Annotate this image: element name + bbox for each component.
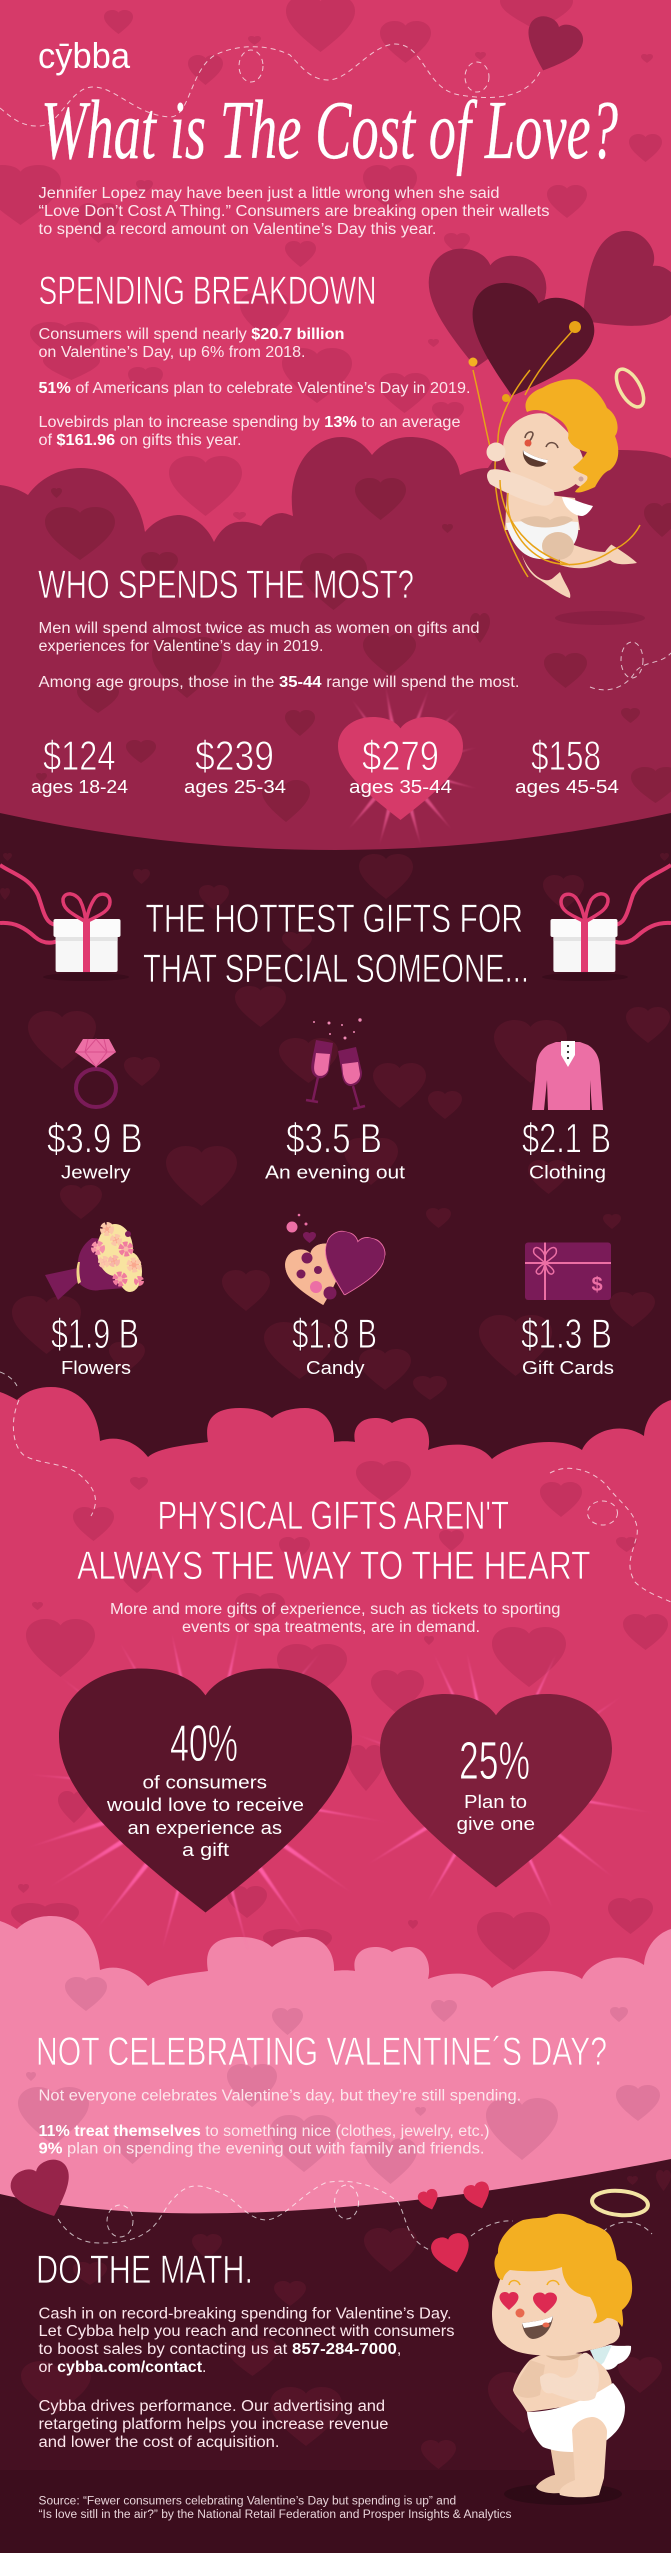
age 35-44: ages 35-44: [349, 777, 452, 797]
item: jewelry: Jewelry: [61, 1163, 130, 1183]
heading: do the math: DO THE MATH.: [36, 2248, 253, 2292]
cupid nose: [524, 440, 532, 446]
spending stats text: 51% of Americans plan to celebrate Valentine’s Day in 2019.: [38, 380, 470, 397]
cupid eyes: [525, 432, 558, 448]
experiences text: events or spa treatments, are in demand.: [182, 1619, 480, 1636]
spending stats text: [38, 326, 470, 449]
icon: heart balloons: [418, 220, 671, 577]
age 18-24: ages 18-24: [31, 777, 128, 797]
item: flowers: Flowers: [61, 1358, 131, 1378]
who spends text: experiences for Valentine’s day in 2019.: [38, 638, 324, 655]
intro text: Jennifer Lopez may have been just a little wrong when she said: [38, 185, 500, 202]
not celebrating text: 9% plan on spending the evening out with family and friends.: [38, 2141, 484, 2158]
age 45-54: ages 45-54: [515, 777, 619, 797]
item: candy: Candy: [306, 1358, 364, 1378]
do the math text: or cybba.com/contact .: [38, 2359, 206, 2376]
intro text: to spend a record amount on Valentine’s Day this year.: [38, 221, 436, 238]
callout: 40 percent heart: [23, 1628, 393, 1950]
icon: bouquet: [45, 1224, 142, 1300]
item: candy: [282, 1214, 389, 1378]
cupid far leg: [522, 555, 570, 598]
item: evening out: An evening out: [265, 1163, 405, 1183]
cupid wing: [562, 497, 593, 516]
item: jewelry: [47, 1039, 142, 1183]
age 25-34: $239: [195, 732, 274, 779]
item: jewelry: $3.9 B: [47, 1114, 142, 1162]
cupid diaper: [506, 521, 578, 559]
age 35-44: $279: [362, 732, 439, 779]
callout: 40 percent heart: 40%: [170, 1715, 238, 1773]
left arm: [514, 2360, 545, 2398]
age 18-24: $124: [43, 732, 116, 779]
shadow: [504, 2483, 622, 2505]
halo: [591, 2189, 649, 2217]
cupid hair: [525, 379, 618, 493]
item: clothing: $2.1 B: [522, 1114, 611, 1162]
callout: 25 percent heart: give one: [456, 1814, 535, 1834]
heart: [380, 1694, 612, 1888]
callout: 25 percent heart: [353, 1652, 658, 1909]
callout: 25 percent heart: 25%: [459, 1731, 530, 1791]
back leg: [536, 2445, 578, 2493]
heart: [59, 1668, 352, 1912]
logo: cȳbba: [38, 35, 131, 76]
icon: right gift box: [542, 865, 671, 981]
item: candy: $1.8 B: [292, 1310, 377, 1357]
highlight heart: [338, 717, 463, 820]
section background: light pink not celebrating: [0, 1916, 671, 2519]
face: [492, 2260, 620, 2355]
item: flowers: $1.9 B: [51, 1310, 139, 1357]
section background: pink experiences: [0, 1387, 671, 1990]
callout: 40 percent heart: a gift: [182, 1840, 229, 1860]
item: evening out: $3.5 B: [286, 1114, 382, 1162]
torso: [513, 2352, 613, 2412]
do the math text: Let Cybba help you reach and reconnect with consumers: [38, 2323, 455, 2340]
source note: [38, 2496, 512, 2521]
section background: deep maroon gifts: [0, 813, 671, 1500]
spending stats text: Consumers will spend nearly $20.7 billion: [38, 326, 344, 343]
rays: [23, 1628, 393, 1950]
section background: deep maroon footer: [0, 2159, 671, 2553]
ear: [596, 2320, 620, 2344]
chart: spending by age group: [31, 684, 619, 846]
intro text: [38, 185, 550, 238]
cupid torso: [505, 490, 580, 530]
do the math text: [38, 2306, 455, 2451]
diaper: [527, 2383, 625, 2452]
age 45-54: [515, 732, 619, 797]
cupid arm: [487, 469, 555, 506]
callout: 40 percent heart: an experience as: [128, 1818, 282, 1838]
experiences text: [110, 1601, 560, 1636]
icon: gift card: $: [591, 1274, 603, 1296]
icon: top dark heart: [517, 12, 587, 80]
not celebrating text: Not everyone celebrates Valentine’s day, but they’re still spending.: [38, 2088, 521, 2105]
neck shadow: [545, 2353, 582, 2360]
cupid ear: [573, 467, 593, 487]
icon: floating hearts: [6, 2155, 494, 2277]
heading: who spends the most: WHO SPENDS THE MOST?: [38, 563, 414, 607]
item: gift cards: [521, 1242, 614, 1378]
do the math text: Cybba drives performance. Our advertising and: [38, 2398, 385, 2415]
heart eyes: [500, 2292, 518, 2310]
section background: dark rose heart clouds: [0, 437, 671, 880]
item: flowers: [45, 1224, 142, 1378]
age 25-34: ages 25-34: [184, 777, 286, 797]
icon: standing cupid with heart eyes: [492, 2189, 649, 2505]
icon: champagne glasses: [306, 1018, 365, 1109]
intro text: “Love Don’t Cost A Thing.” Consumers are breaking open their wallets: [38, 203, 550, 220]
wing: [592, 2345, 631, 2370]
cupid bow string: [500, 480, 640, 565]
icon: candy box: [282, 1214, 389, 1312]
icon: cupid with balloons: [486, 365, 649, 625]
cupid mouth: [523, 450, 548, 467]
heading: spending breakdown: SPENDING BREAKDOWN: [38, 269, 376, 313]
footer band: [0, 2470, 671, 2553]
not celebrating text: [38, 2088, 521, 2158]
who spends text: Men will spend almost twice as much as women on gifts and: [38, 620, 480, 637]
age 18-24: [31, 732, 128, 797]
spending stats text: of $161.96 on gifts this year.: [38, 432, 242, 449]
nose: [516, 2308, 524, 2318]
heading: physical gifts: [77, 1494, 590, 1588]
callout: 40 percent heart: would love to receive: [106, 1795, 304, 1815]
age 35-44: [349, 732, 452, 797]
item: gift cards: Gift Cards: [522, 1358, 614, 1378]
heading: physical gifts: PHYSICAL GIFTS AREN'T: [158, 1494, 509, 1538]
right arm and hand: [540, 2353, 599, 2401]
not celebrating text: 11% treat themselves to something nice (clothes, jewelry, etc.): [38, 2123, 490, 2140]
age 45-54: $158: [531, 732, 601, 779]
do the math text: Cash in on record-breaking spending for Valentine’s Day.: [38, 2306, 451, 2322]
heading: hottest gifts: THE HOTTEST GIFTS FOR: [146, 897, 523, 941]
do the math text: to boost sales by contacting us at 857-284-7000 ,: [38, 2341, 402, 2358]
callout: 40 percent heart: of consumers: [142, 1773, 267, 1793]
eyebrows: [509, 2280, 559, 2285]
mouth: [522, 2316, 553, 2339]
item: clothing: [522, 1041, 611, 1183]
icon: cardigan: [532, 1041, 603, 1110]
spending stats text: Lovebirds plan to increase spending by 13% to an average: [38, 414, 460, 431]
rays behind highlight heart: [346, 684, 478, 846]
item: clothing: Clothing: [529, 1163, 606, 1183]
heading: hottest gifts: [143, 897, 529, 991]
cupid front leg: [560, 540, 637, 568]
icon: ring: [75, 1039, 116, 1107]
experiences text: More and more gifts of experience, such as tickets to sporting: [110, 1601, 560, 1618]
age 25-34: [184, 732, 286, 797]
hair: [494, 2214, 632, 2327]
item: gift cards: $1.3 B: [521, 1310, 612, 1357]
source note: “Is love sitll in the air?” by the National Retail Federation and Prosper Insights & Analytics: [38, 2509, 512, 2521]
spending stats text: on Valentine’s Day, up 6% from 2018.: [38, 344, 306, 361]
source note: Source: “Fewer consumers celebrating Valentine’s Day but spending is up” and: [38, 2496, 456, 2508]
cupid hand: [486, 442, 506, 462]
section background: pink top: [0, 0, 671, 560]
heading: hottest gifts: THAT SPECIAL SOMEONE...: [143, 947, 529, 991]
icon: left gift box: [0, 865, 129, 981]
do the math text: retargeting platform helps you increase revenue: [38, 2416, 388, 2433]
who spends text: Among age groups, those in the 35-44 range will spend the most.: [38, 674, 520, 691]
cupid shadow: [555, 611, 645, 625]
item: evening out: [265, 1018, 405, 1183]
rays: [353, 1652, 658, 1909]
front leg: [560, 2417, 607, 2497]
do the math text: and lower the cost of acquisition.: [38, 2434, 280, 2451]
who spends text: [38, 620, 520, 691]
cupid face: [503, 413, 584, 492]
callout: 25 percent heart: Plan to: [464, 1792, 527, 1812]
cupid halo: [611, 365, 649, 411]
